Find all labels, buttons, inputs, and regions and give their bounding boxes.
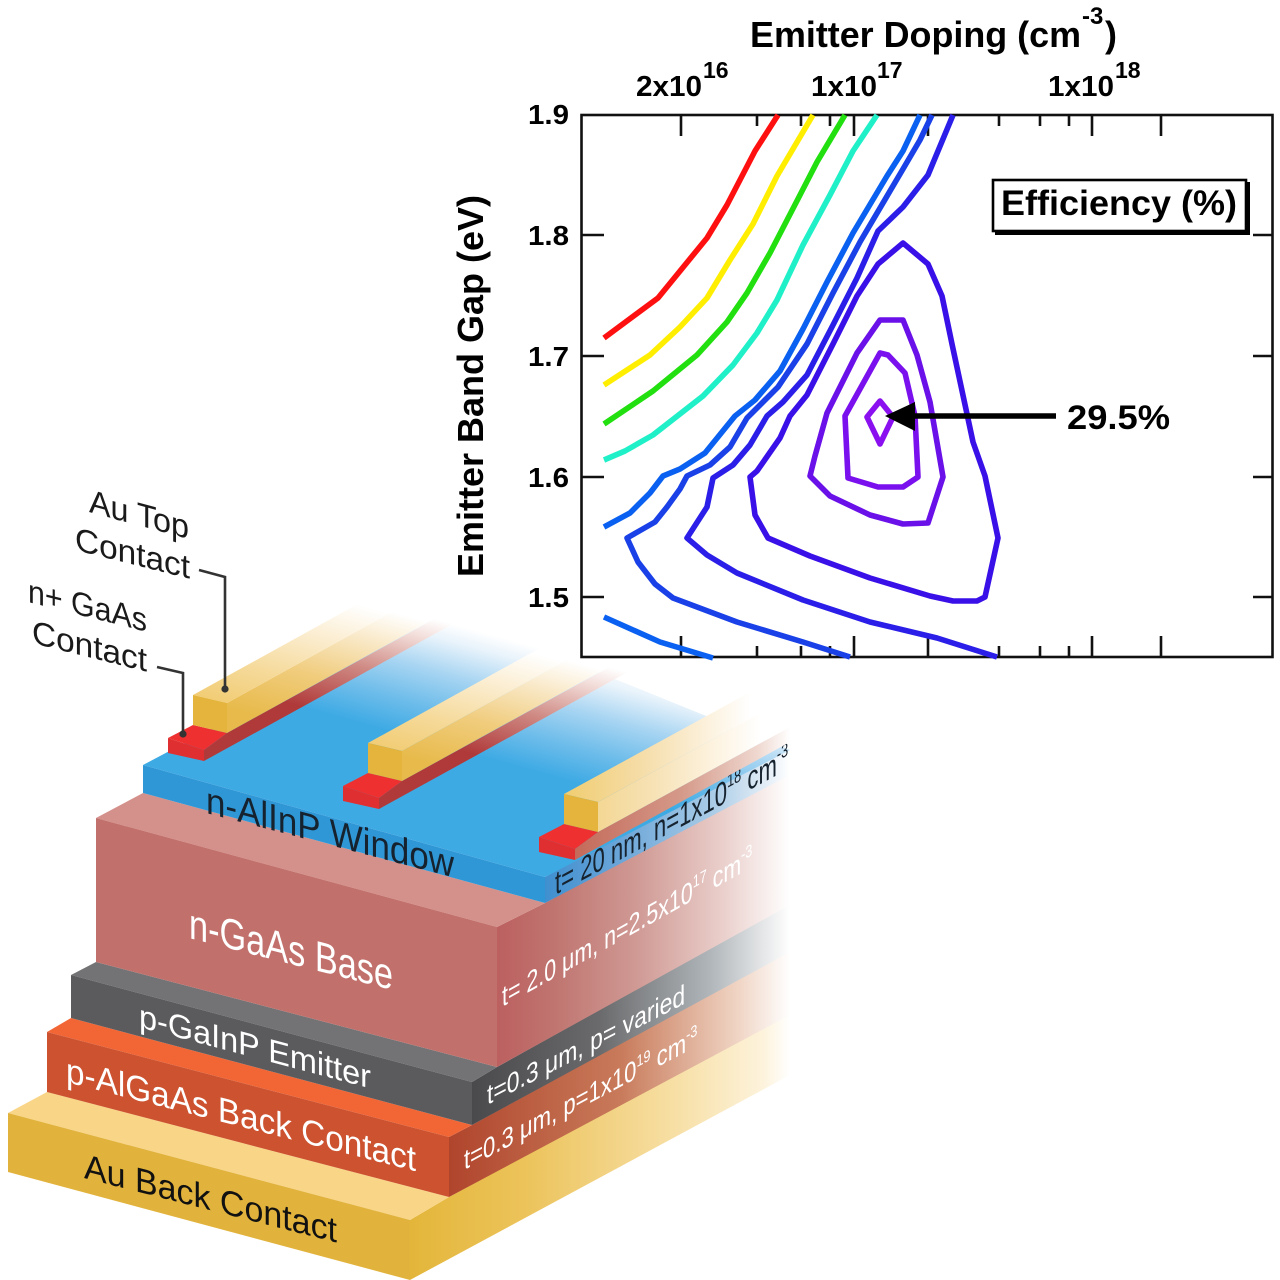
layer: n-AlInP window (143, 608, 790, 903)
x axis title: -3 (1082, 3, 1103, 30)
y axis tick labels: 1.7 (528, 341, 569, 372)
x axis tick labels: 17 (877, 57, 903, 83)
layer: n-GaAs base: -3 (741, 841, 752, 865)
layer: Au back contact (8, 1012, 790, 1280)
layer: p-AlGaAs back contact: cm (651, 1027, 686, 1077)
layer: n-AlInP window: t= 20 nm, n=1x10 (555, 773, 727, 903)
arrow and peak value callout (885, 399, 1170, 437)
layer: Au back contact: Au Back Contact (84, 1147, 337, 1250)
layer: n-AlInP window: -3 (777, 738, 788, 766)
contact finger 3 (539, 689, 790, 860)
layer: n-GaAs base: n-GaAs Base (189, 900, 393, 1000)
y axis tick labels (528, 99, 569, 613)
layer: p-AlGaAs back contact: t=0.3 μm, p=1x10 (464, 1053, 636, 1176)
layer: p-GaInP emitter (71, 904, 790, 1125)
x axis tick labels: 16 (703, 57, 729, 83)
layer: n-AlInP window: n-AlInP Window (206, 780, 454, 886)
y axis title: Emitter Band Gap (eV) (450, 195, 491, 577)
layer: n-GaAs base (96, 770, 790, 1067)
layer: n-GaAs base: t= 2.0 μm, n=2.5x10 (502, 874, 693, 1013)
x axis tick labels: 2x10 (636, 71, 702, 103)
y axis tick labels: 1.6 (528, 462, 569, 493)
y axis tick labels: 1.8 (528, 220, 569, 251)
x axis tick labels (636, 57, 1141, 103)
label: n+ GaAs Contact: n+ GaAs (28, 573, 147, 640)
layer: p-AlGaAs back contact: 19 (636, 1046, 651, 1072)
x axis tick labels: 1x10 (811, 71, 877, 103)
legend box: Efficiency (%) (993, 180, 1250, 235)
layer: p-AlGaAs back contact (47, 950, 790, 1197)
layer: n-GaAs base: cm (707, 847, 741, 899)
layer: p-AlGaAs back contact: p-AlGaAs Back Contact (66, 1051, 416, 1179)
plot frame and ticks (582, 115, 1272, 657)
x axis title: ) (1105, 14, 1117, 55)
chart: efficiency contour plot (450, 3, 1272, 658)
y axis tick labels: 1.5 (528, 582, 569, 613)
contact finger 1 (168, 568, 460, 761)
layer: n-AlInP window: 18 (727, 763, 741, 793)
contour lines (604, 115, 998, 658)
x axis tick labels: 1x10 (1048, 71, 1114, 103)
x axis title: Emitter Doping (cm (750, 14, 1081, 55)
layer: p-AlGaAs back contact: -3 (686, 1021, 697, 1045)
label: Au Top Contact (75, 484, 229, 693)
x axis tick labels: 18 (1115, 57, 1141, 83)
contact finger 2 (343, 616, 635, 809)
legend box: Efficiency (%): Efficiency (%) (1001, 184, 1237, 223)
layer: p-GaInP emitter: p-GaInP Emitter (139, 998, 371, 1096)
arrow and peak value callout: 29.5% (1067, 399, 1170, 437)
label: Au Top Contact: Contact (75, 521, 191, 587)
panel: layered solar cell stack (8, 568, 790, 1280)
layer: n-AlInP window: cm (741, 746, 777, 802)
label: n+ GaAs Contact: Contact (32, 614, 148, 680)
label: n+ GaAs Contact (28, 573, 187, 738)
label: Au Top Contact: Au Top (89, 484, 189, 547)
layer: n-GaAs base: 17 (693, 866, 707, 893)
layer: p-GaInP emitter: t=0.3 μm, p= varied (487, 979, 685, 1111)
y axis tick labels: 1.9 (528, 99, 569, 130)
